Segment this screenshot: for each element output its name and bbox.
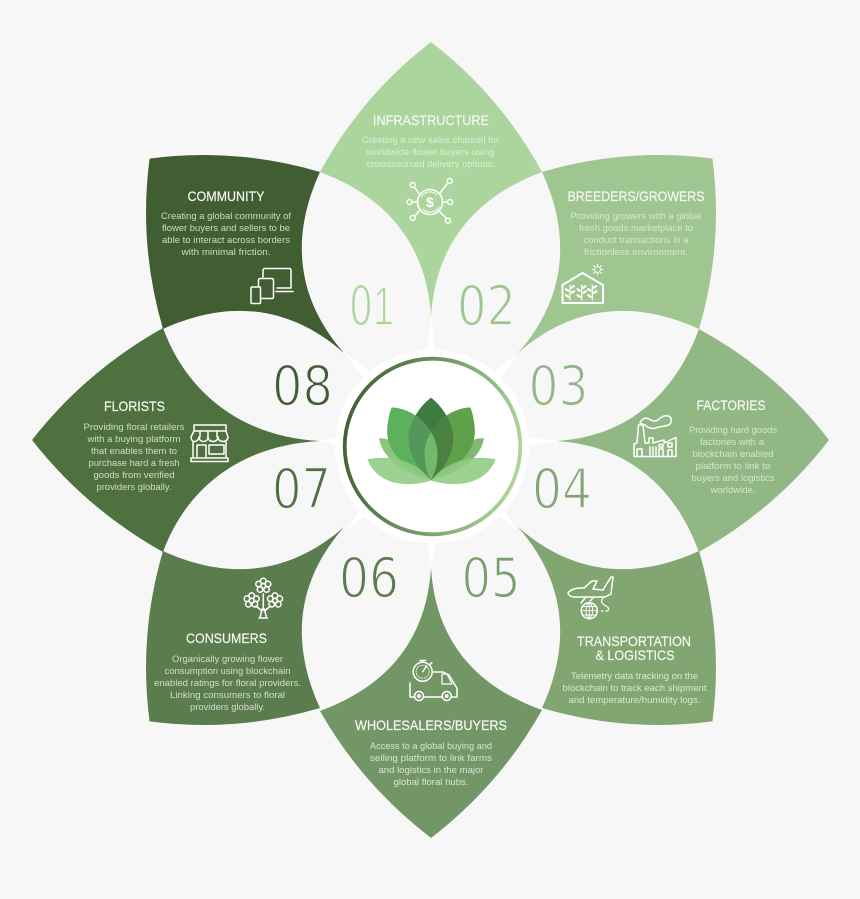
panel: factories petal: factories with a	[700, 437, 765, 448]
panel: florists petal: purchase hard a fresh	[88, 458, 180, 469]
panel: infrastructure petal: INFRASTRUCTURE	[373, 112, 489, 128]
icon: factory with smoke	[634, 416, 676, 456]
icon: dollar network	[407, 178, 452, 223]
number 02: 02	[457, 274, 516, 338]
panel: factories petal: FACTORIES	[696, 397, 766, 413]
panel: consumers petal: enabled ratings for floral providers.	[154, 678, 301, 689]
number 06: 06	[339, 546, 399, 610]
panel: infrastructure petal: crowdsourced delivery options.	[366, 159, 495, 170]
panel: community petal: flower buyers and sellers to be	[162, 223, 290, 234]
panel: florists petal: with a buying platform	[86, 434, 181, 445]
number 08: 08	[272, 354, 333, 418]
number 07: 07	[272, 457, 331, 521]
panel: breeders/growers petal: frictionless environment.	[584, 247, 688, 258]
panel: transportation and logistics petal: TRANSPORTATION	[577, 633, 691, 649]
number 04: 04	[532, 457, 592, 521]
panel: florists petal: that enables them to	[91, 446, 177, 457]
panel: community petal: COMMUNITY	[188, 188, 265, 204]
panel: breeders/growers petal	[439, 80, 791, 432]
icon: flower shop storefront	[191, 425, 228, 462]
panel: transportation and logistics petal: blockchain to track each shipment	[562, 683, 707, 694]
icon: airplane and globe	[568, 577, 613, 619]
panel: consumers petal: providers globally.	[190, 702, 265, 713]
panel: breeders/growers petal: Providing growers with a global	[570, 211, 702, 222]
panel: wholesalers/buyers petal: global floral hubs.	[394, 777, 468, 788]
panel: factories petal: Providing hard goods	[689, 425, 777, 436]
icon: delivery van with stopwatch	[410, 660, 457, 700]
panel: community petal: with minimal friction.	[180, 247, 270, 258]
panel: community petal: Creating a global community of	[161, 211, 291, 222]
panel: factories petal: worldwide.	[709, 485, 756, 496]
number 03: 03	[528, 354, 588, 418]
icon: flowering tree	[244, 578, 283, 618]
panel: factories petal	[557, 329, 829, 552]
panel: consumers petal: consumption using blockchain	[164, 666, 290, 677]
panel: transportation and logistics petal: Telemetry data tracking on the	[571, 671, 698, 682]
panel: consumers petal	[71, 448, 423, 800]
panel: transportation and logistics petal	[439, 448, 791, 800]
panel: florists petal: Providing floral retailers	[84, 422, 185, 433]
panel: factories petal: buyers and logistics	[692, 473, 775, 484]
panel: florists petal: goods from verified	[94, 470, 174, 481]
panel: transportation and logistics petal: and temperature/humidity logs.	[568, 695, 700, 706]
panel: wholesalers/buyers petal: WHOLESALERS/BUYERS	[355, 717, 507, 733]
panel: infrastructure petal: Creating a new sales channel for	[362, 135, 499, 146]
icon: lotus logo	[367, 398, 496, 484]
panel: breeders/growers petal: fresh goods marketplace to	[579, 223, 693, 234]
panel: florists petal: providers globally.	[96, 482, 172, 493]
panel: wholesalers/buyers petal	[320, 568, 542, 838]
panel: infrastructure petal	[320, 42, 542, 316]
panel: community petal: able to interact across borders	[162, 235, 290, 246]
panel: wholesalers/buyers petal: Access to a global buying and	[370, 741, 492, 752]
panel: factories petal: platform to link to	[696, 461, 770, 472]
number 01: 01	[349, 274, 394, 338]
icon: greenhouse with sun	[562, 264, 603, 303]
central white halo with tapered spokes	[318, 315, 559, 566]
central gradient ring	[345, 359, 520, 534]
panel: florists petal	[32, 328, 320, 552]
panel: transportation and logistics petal: & LOGISTICS	[596, 647, 674, 663]
panel: infrastructure petal: worldwide flower buyers using	[365, 147, 494, 158]
icon: dollar network: $	[426, 194, 434, 210]
panel: consumers petal: Organically growing flower	[172, 654, 283, 665]
panel: community petal	[71, 80, 423, 432]
panel: wholesalers/buyers petal: selling platform to link farms	[370, 753, 492, 764]
panel: breeders/growers petal: conduct transactions in a	[584, 235, 689, 246]
icon: connected devices	[251, 268, 293, 304]
panel: florists petal: FLORISTS	[104, 398, 165, 414]
number 05: 05	[462, 546, 520, 610]
panel: wholesalers/buyers petal: and logistics in the major	[378, 765, 484, 776]
panel: consumers petal: CONSUMERS	[186, 630, 267, 646]
panel: breeders/growers petal: BREEDERS/GROWERS	[568, 188, 704, 204]
panel: factories petal: blockchain enabled	[692, 449, 774, 460]
panel: consumers petal: Linking consumers to floral	[170, 690, 285, 701]
